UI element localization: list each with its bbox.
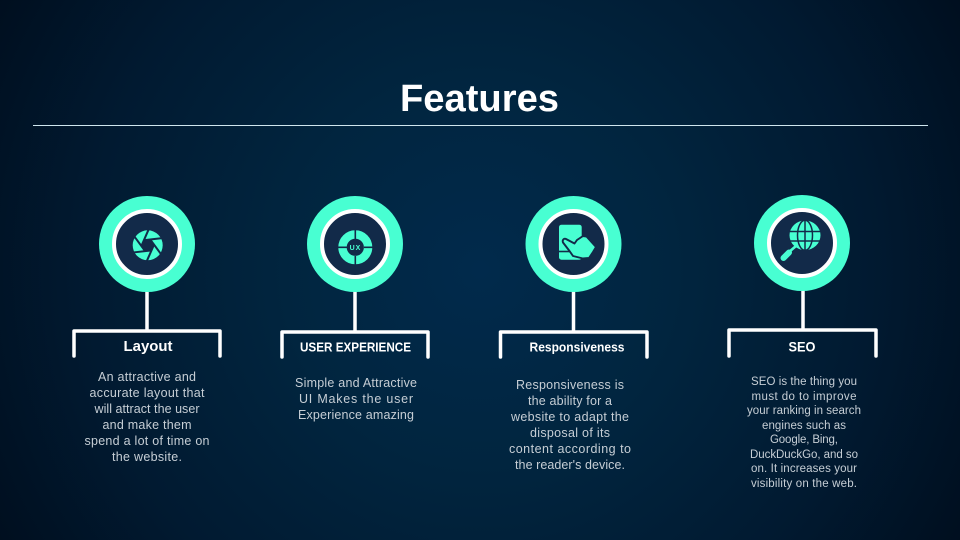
text: responsiveness: content according to — [509, 442, 631, 456]
text: seo: visibility on the web. — [751, 478, 857, 490]
heading: responsiveness: Responsiveness — [530, 340, 625, 354]
text: user experience: Experience amazing — [298, 408, 414, 422]
heading: seo: SEO — [788, 340, 816, 354]
text: seo: on. It increases your — [751, 463, 857, 475]
text: layout: spend a lot of time on — [84, 434, 210, 448]
text: user experience: UI Makes the user — [299, 392, 413, 406]
icon: camera aperture — [131, 229, 165, 261]
text: responsiveness: the reader's device. — [515, 458, 625, 472]
text: seo: SEO is the thing you — [751, 376, 857, 388]
text: layout: will attract the user — [94, 402, 200, 416]
text: seo: your ranking in search — [747, 405, 861, 417]
text: layout — [84, 370, 210, 464]
text: responsiveness: website to adapt the — [510, 410, 629, 424]
text: seo: DuckDuckGo, and so — [750, 449, 858, 461]
panel: user experience — [282, 196, 428, 422]
text: layout: accurate layout that — [90, 386, 205, 400]
connector: responsiveness — [500, 278, 647, 357]
connector: seo — [729, 278, 876, 356]
heading: layout: Layout — [124, 338, 173, 355]
text: responsiveness: the ability for a — [528, 394, 612, 408]
text: seo: must do to improve — [752, 391, 856, 403]
text: responsiveness: disposal of its — [530, 426, 610, 440]
badge: user experience — [307, 196, 403, 292]
badge: responsiveness — [526, 196, 622, 292]
icon: UX target: UX — [350, 245, 361, 252]
icon: globe search — [784, 220, 821, 258]
text: seo: Google, Bing, — [770, 434, 838, 446]
text: layout: the website. — [112, 450, 182, 464]
badge: seo — [754, 195, 850, 291]
panel: seo — [729, 195, 876, 490]
heading: user experience: USER EXPERIENCE — [300, 340, 411, 354]
text: user experience — [295, 376, 417, 422]
text: responsiveness: Responsiveness is — [516, 378, 624, 392]
badge: layout — [99, 196, 195, 292]
text: layout: An attractive and — [98, 370, 196, 384]
panel: layout — [74, 196, 220, 464]
text: seo — [747, 376, 861, 490]
text: seo: engines such as — [762, 420, 846, 432]
icon: hand tapping phone — [559, 225, 596, 260]
text: responsiveness — [509, 378, 631, 472]
text: layout: and make them — [102, 418, 192, 432]
panel: responsiveness — [500, 196, 647, 472]
connector: layout — [74, 278, 220, 356]
connector: user experience — [282, 278, 428, 357]
title: Features — [400, 78, 559, 120]
icon: UX target — [337, 229, 374, 266]
text: user experience: Simple and Attractive — [295, 376, 417, 390]
